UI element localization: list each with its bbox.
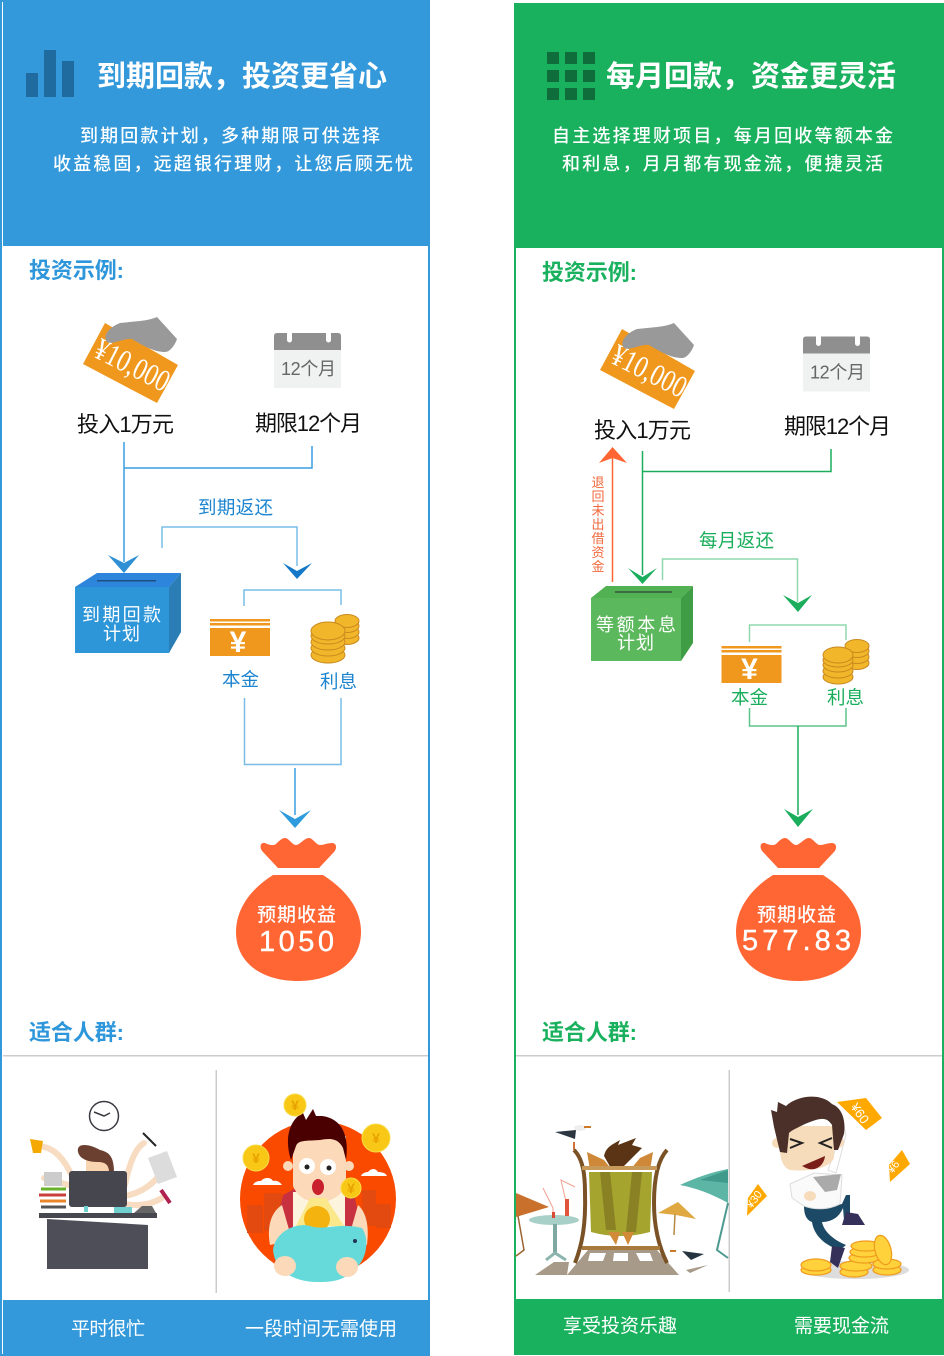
money bag: expected return 577.83 <box>736 838 861 981</box>
bracket: sum <box>244 698 341 764</box>
footer band: maturity <box>3 1300 430 1356</box>
header band: monthly <box>514 3 944 248</box>
icon: principal card: ¥ <box>230 626 247 659</box>
illustration: man with piggy bank: ¥ <box>291 1097 299 1113</box>
label: 12 month term: 期限12个月 <box>255 411 362 436</box>
panel: maturity repayment <box>1 0 430 1356</box>
label: refund of unlent funds: 借 <box>591 531 605 546</box>
description: monthly <box>552 126 893 174</box>
description: maturity: 收益稳固，远超银行理财，让您后顾无忧 <box>53 154 413 174</box>
icon: bar chart <box>26 50 74 97</box>
icon: principal card <box>722 646 782 686</box>
bracket: principal and interest <box>244 590 341 606</box>
heading: suitable people: 适合人群: <box>542 1020 637 1045</box>
return line <box>662 559 798 602</box>
money bag: expected return 577.83: 预期收益 <box>757 904 836 926</box>
label: refund of unlent funds: 资 <box>591 545 605 560</box>
icon: hand and banknote <box>83 317 178 403</box>
label: refund of unlent funds: 出 <box>591 517 605 532</box>
illustration: man with piggy bank: ¥ <box>347 1180 355 1196</box>
icon: calendar: 12个月 <box>281 359 336 379</box>
illustration: busy worker <box>30 1102 177 1269</box>
bracket: principal and interest <box>750 625 846 642</box>
flow lines: inputs to plan <box>124 442 312 562</box>
footer band: monthly: 需要现金流 <box>794 1315 889 1337</box>
label: refund of unlent funds: 退 <box>591 475 605 490</box>
arrow: refund of unlent funds <box>599 447 627 582</box>
arrow: to principal and interest <box>283 563 312 579</box>
plan box: maturity: 到期回款 <box>82 605 161 625</box>
flow lines: inputs to plan <box>642 449 831 575</box>
heading: suitable people: 适合人群: <box>29 1020 124 1045</box>
label: returned at maturity: 到期返还 <box>198 497 273 518</box>
footer band: monthly: 享受投资乐趣 <box>563 1315 677 1337</box>
footer band: maturity: 平时很忙 <box>71 1318 145 1340</box>
label: refund of unlent funds: 回 <box>591 489 605 504</box>
plan box: monthly <box>591 586 693 661</box>
arrow: into plan box <box>628 568 657 584</box>
icon: grid <box>547 52 595 100</box>
heading: investment example: 投资示例: <box>29 258 124 283</box>
money bag: expected return 1050: 1050 <box>259 926 334 958</box>
label: invest 10k: 投入1万元 <box>594 418 691 443</box>
illustration: happy man with money: ¥30 <box>744 1189 765 1212</box>
arrow: to expected return <box>279 768 311 828</box>
icon: principal card: ¥ <box>741 653 758 686</box>
illustration: happy man with money: ¥6 <box>885 1159 902 1177</box>
icon: principal card <box>210 619 270 659</box>
icon: calendar <box>274 333 341 388</box>
heading: investment example: 投资示例: <box>542 260 637 285</box>
bracket: sum <box>750 708 846 726</box>
header band: maturity <box>3 0 430 246</box>
label: refund of unlent funds: 未 <box>591 503 605 518</box>
plan box: monthly: 计划 <box>617 633 654 653</box>
label: interest: 利息 <box>827 687 864 708</box>
icon: hand and banknote: ¥10,000 <box>89 331 176 399</box>
footer band: monthly <box>514 1299 944 1354</box>
panel: monthly repayment <box>514 3 944 1354</box>
icon: hand and banknote <box>600 323 695 409</box>
label: invest 10k: 投入1万元 <box>77 412 174 437</box>
money bag: expected return 577.83: 577.83 <box>742 925 851 957</box>
plan box: maturity <box>75 573 181 653</box>
icon: coin stacks <box>311 614 359 663</box>
illustration: man with piggy bank: ¥ <box>252 1150 260 1166</box>
description: maturity: 到期回款计划，多种期限可供选择 <box>80 126 380 146</box>
illustration: man with piggy bank <box>240 1094 396 1282</box>
label: interest: 利息 <box>320 671 357 692</box>
arrow: to principal and interest <box>783 595 812 612</box>
illustration: happy man with money: ¥60 <box>847 1099 872 1126</box>
illustration: man with piggy bank: ¥ <box>372 1130 380 1146</box>
plan box: maturity: 计划 <box>103 624 140 644</box>
description: monthly: 自主选择理财项目，每月回收等额本金 <box>552 126 893 146</box>
description: monthly: 和利息，月月都有现金流，便捷灵活 <box>562 154 883 174</box>
arrow: to expected return <box>784 726 813 827</box>
label: refund of unlent funds <box>591 475 605 574</box>
label: principal: 本金 <box>731 687 768 708</box>
return line <box>162 527 297 566</box>
illustration: beach chair <box>516 1125 728 1275</box>
title: monthly: 每月回款，资金更灵活 <box>606 60 896 93</box>
title: maturity: 到期回款，投资更省心 <box>97 60 387 93</box>
icon: calendar: 12个月 <box>810 362 865 382</box>
illustration: happy man with money <box>744 1097 910 1279</box>
label: 12 month term: 期限12个月 <box>784 414 891 439</box>
icon: hand and banknote: ¥10,000 <box>606 337 693 405</box>
icon: calendar <box>803 336 870 392</box>
arrow: into plan box <box>108 555 139 573</box>
label: principal: 本金 <box>222 669 259 690</box>
icon: coin stacks <box>823 640 869 684</box>
label: returned monthly: 每月返还 <box>699 530 774 551</box>
description: maturity <box>53 126 413 174</box>
label: refund of unlent funds: 金 <box>591 559 605 574</box>
money bag: expected return 1050 <box>236 838 361 981</box>
footer band: maturity: 一段时间无需使用 <box>245 1318 397 1340</box>
plan box: monthly: 等额本息 <box>596 615 676 635</box>
money bag: expected return 1050: 预期收益 <box>257 904 336 926</box>
